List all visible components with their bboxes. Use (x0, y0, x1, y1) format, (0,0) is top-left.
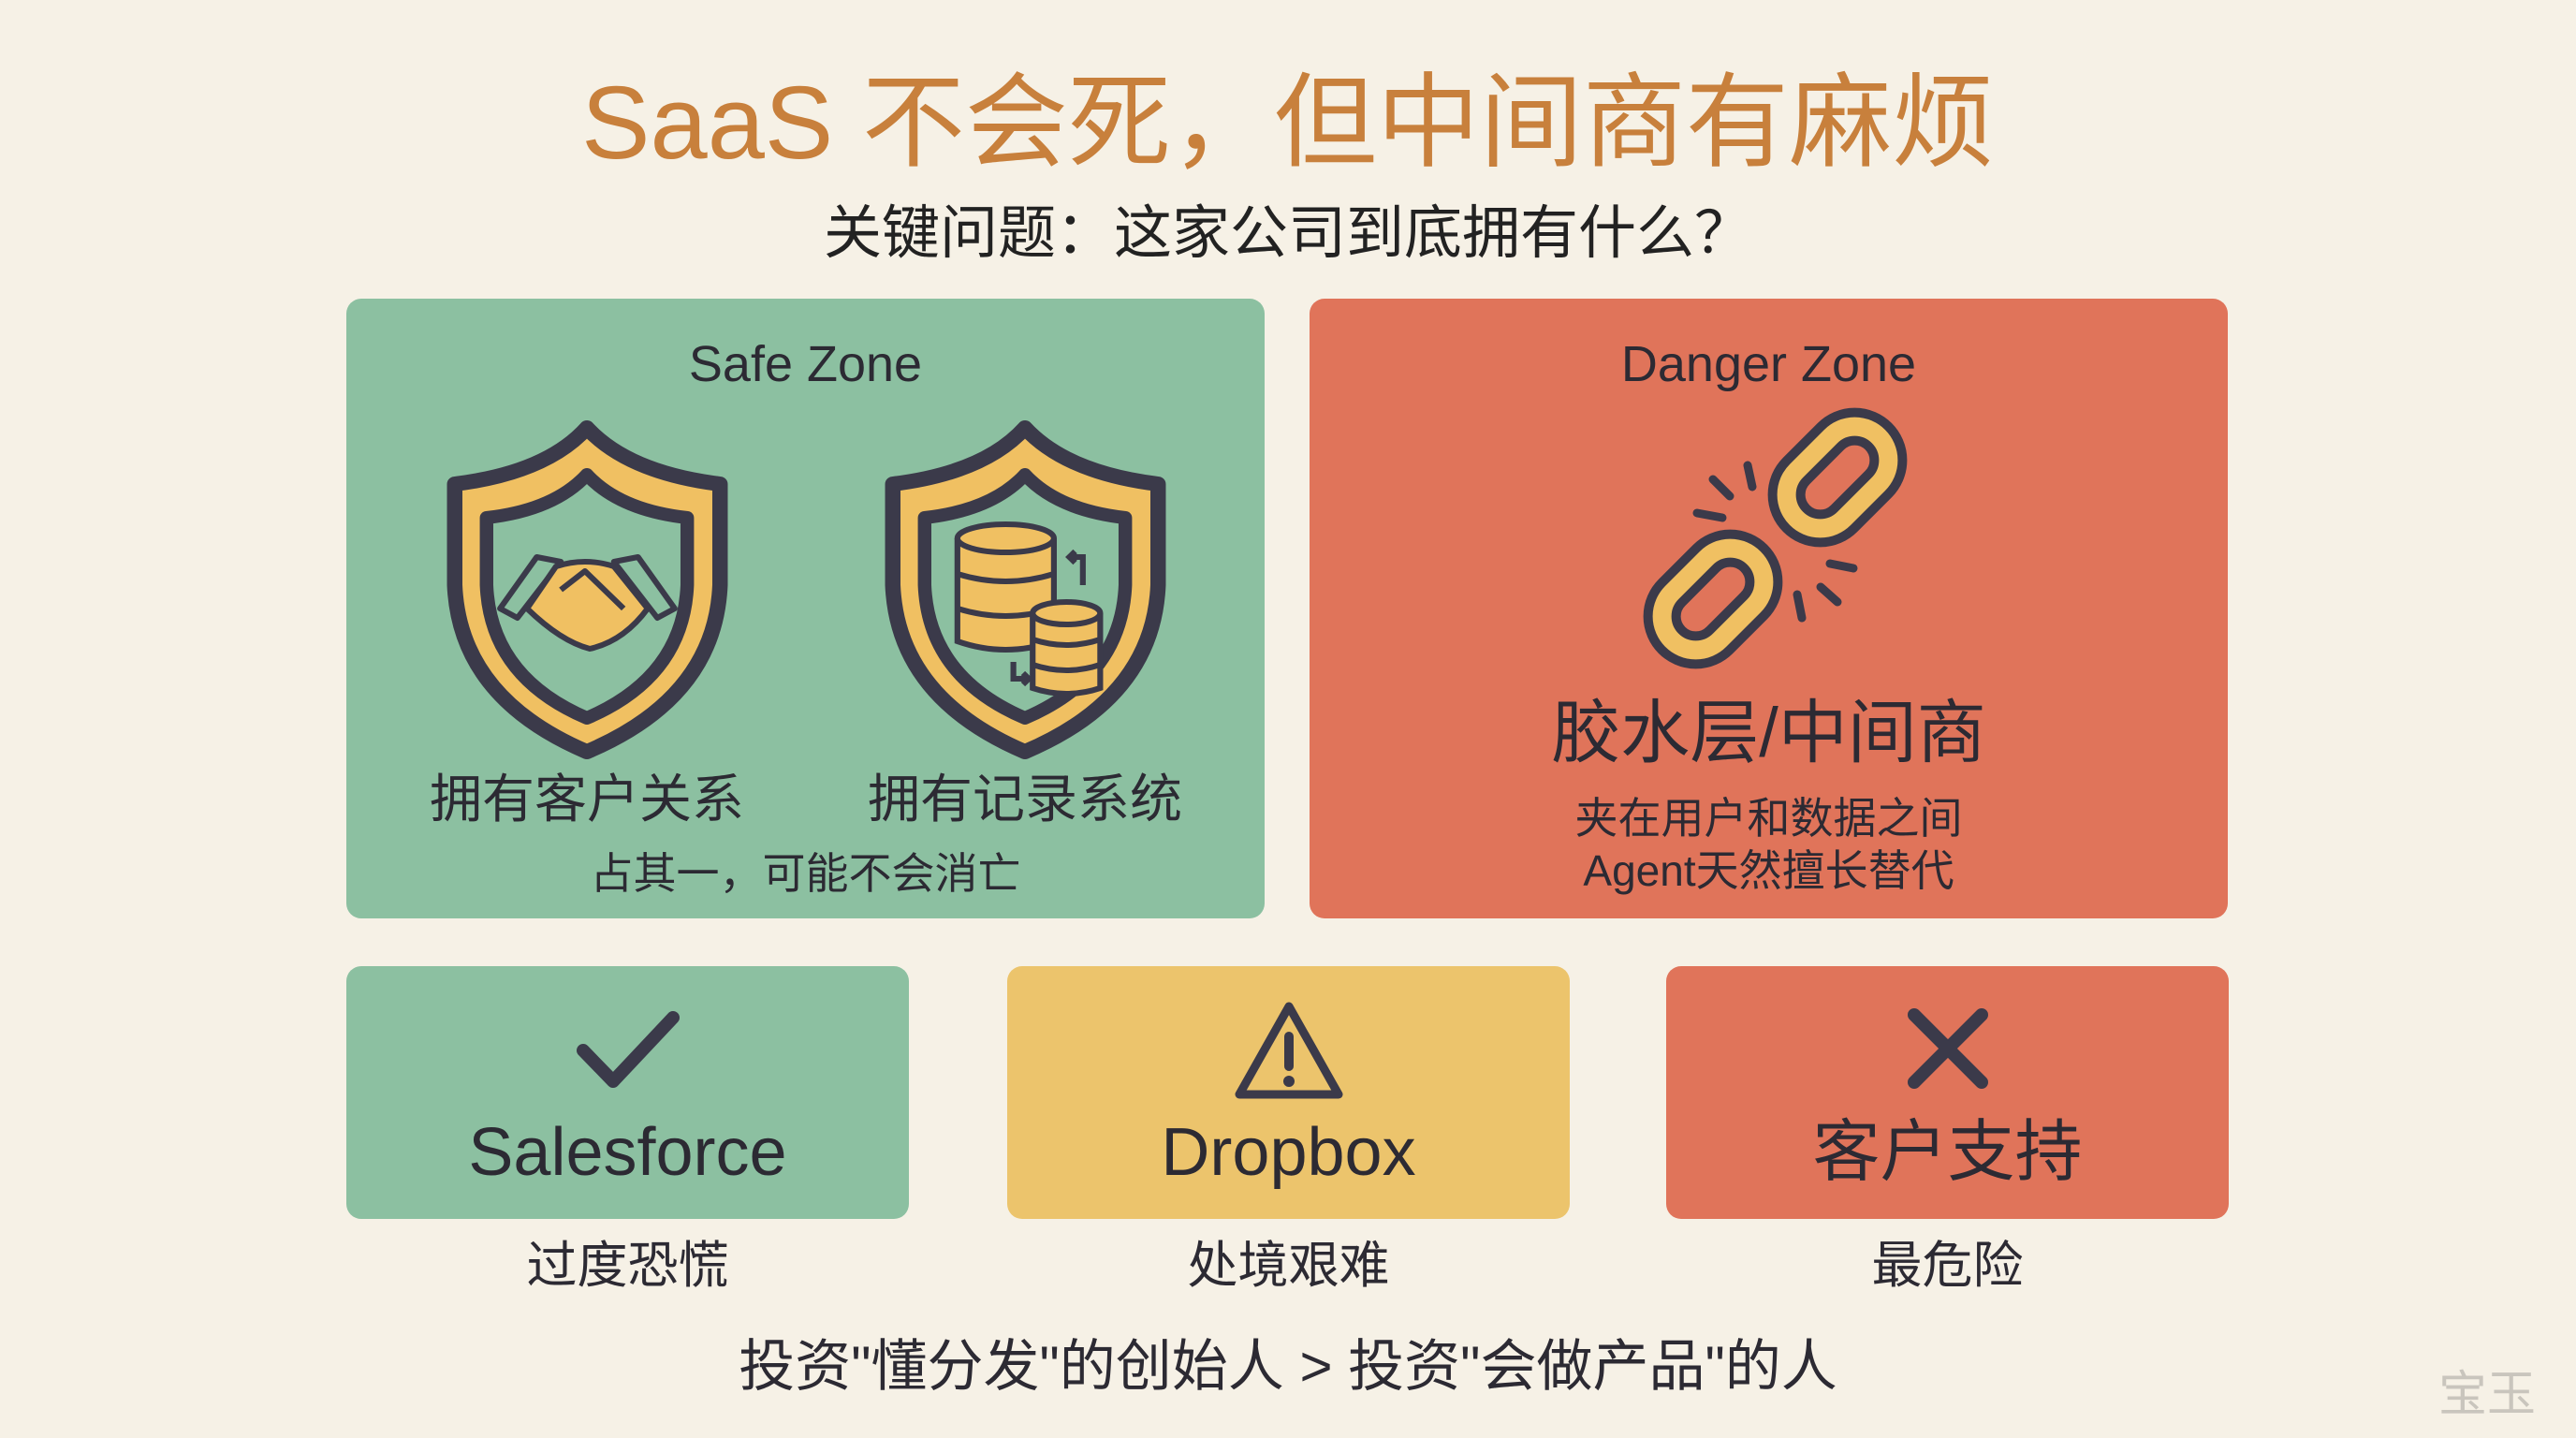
caption: Salesforce: 过度恐慌 (526, 1238, 728, 1294)
label: system of record: 拥有记录系统 (868, 770, 1182, 829)
title: SaaS 不会死，但中间商有麻烦 (581, 66, 1995, 181)
text: description: Agent天然擅长替代 (1583, 846, 1954, 895)
label: Salesforce (468, 1115, 787, 1190)
text: description: 夹在用户和数据之间 (1574, 794, 1962, 843)
heading: Danger Zone: Danger Zone (1621, 336, 1916, 392)
icon: cross (1908, 1008, 1988, 1089)
panel: danger zone (1310, 299, 2228, 918)
caption: 占其一，可能不会消亡 (590, 849, 1020, 898)
icon: shield database (886, 420, 1166, 759)
card: Salesforce (346, 966, 909, 1219)
icon: warning (1236, 1002, 1342, 1099)
panel: safe zone (346, 299, 1265, 918)
label: Dropbox (1161, 1115, 1416, 1190)
label: 客户支持 (1812, 1115, 2082, 1190)
icon: check (577, 1011, 680, 1088)
caption: support: 最危险 (1872, 1238, 2024, 1294)
text: description (1574, 794, 1962, 895)
caption: Dropbox: 处境艰难 (1187, 1238, 1389, 1294)
icon: broken chain (1644, 408, 1908, 668)
card: customer support (1666, 966, 2229, 1219)
icon: shield handshake (447, 420, 728, 759)
card: Dropbox (1007, 966, 1570, 1219)
watermark: 宝玉 (2438, 1368, 2536, 1422)
conclusion: 投资"懂分发"的创始人 > 投资"会做产品"的人 (739, 1335, 1837, 1398)
label: customer relations: 拥有客户关系 (430, 770, 744, 829)
heading: glue layer: 胶水层/中间商 (1551, 694, 1986, 771)
heading: Safe Zone: Safe Zone (689, 336, 922, 392)
subtitle: 关键问题：这家公司到底拥有什么？ (824, 201, 1752, 266)
